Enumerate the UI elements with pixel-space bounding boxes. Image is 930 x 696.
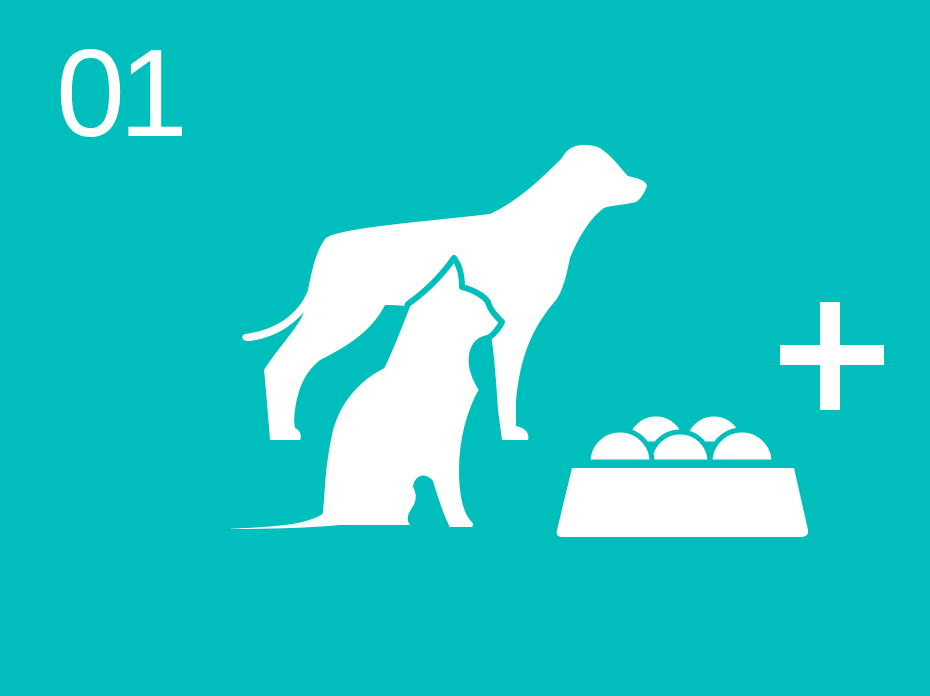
icon: dog: [242, 145, 647, 440]
title number: 01: [56, 25, 182, 163]
icon: food bowl: [557, 414, 808, 537]
icon: plus: [780, 302, 884, 410]
bowl: [557, 468, 808, 537]
icon: cat: [228, 258, 502, 532]
food pieces: [588, 414, 774, 462]
